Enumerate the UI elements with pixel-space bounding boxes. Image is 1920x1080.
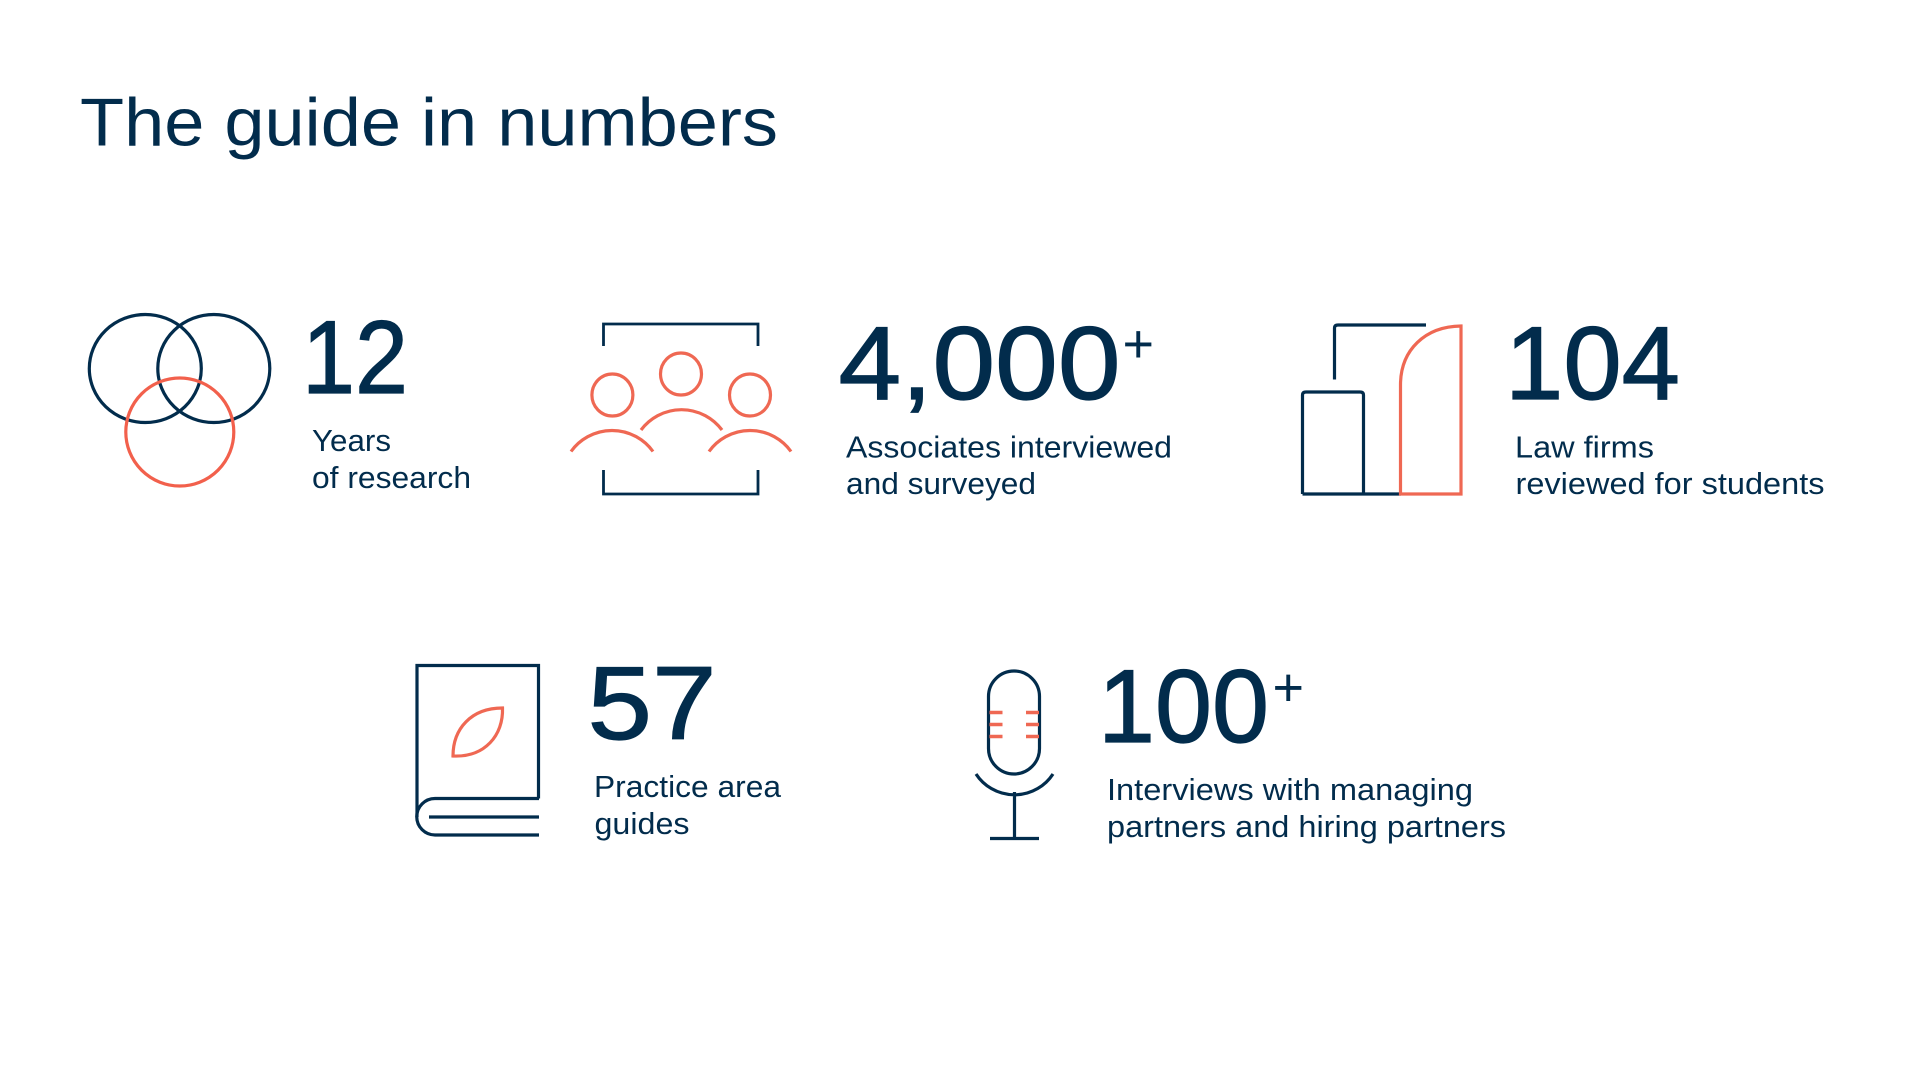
icon: overlapping circles [89, 314, 270, 486]
number: 4,000 with plus: 4,000 [838, 306, 1120, 422]
icon: group of people in frame [571, 324, 791, 494]
number: 100 with plus: 100 [1098, 649, 1269, 765]
icon: microphone [976, 671, 1053, 838]
label: practice area guides: guides [594, 807, 690, 841]
label: interviews with managing partners and hiring partners: partners and hiring partners [1107, 810, 1506, 844]
number: 12: 12 [302, 300, 408, 416]
icon: book with leaf [417, 666, 539, 835]
stat: 57 practice area guides [417, 646, 781, 841]
label: law firms reviewed for students: reviewed for students [1516, 467, 1824, 501]
label: years of research: Years [312, 424, 391, 458]
label: practice area guides: Practice area [594, 770, 781, 804]
stat: 4,000+ associates [571, 306, 1172, 501]
number: 100 with plus: + [1272, 658, 1304, 718]
label: associates interviewed and surveyed: and surveyed [846, 467, 1036, 501]
number: 57: 57 [588, 646, 716, 762]
label: interviews with managing partners and hiring partners: Interviews with managing [1107, 773, 1473, 807]
icon: buildings [1302, 325, 1461, 494]
title: The guide in numbers [80, 84, 778, 160]
label: years of research: of research [312, 461, 471, 495]
stat: 100+ interviews [976, 649, 1506, 844]
stat: 104 law firms [1302, 306, 1824, 501]
number: 104: 104 [1505, 306, 1680, 422]
stat: 12 years of research [89, 300, 471, 495]
label: law firms reviewed for students: Law firms [1515, 430, 1654, 464]
number: 4,000 with plus: + [1122, 314, 1154, 374]
label: associates interviewed and surveyed: Associates interviewed [846, 430, 1172, 464]
